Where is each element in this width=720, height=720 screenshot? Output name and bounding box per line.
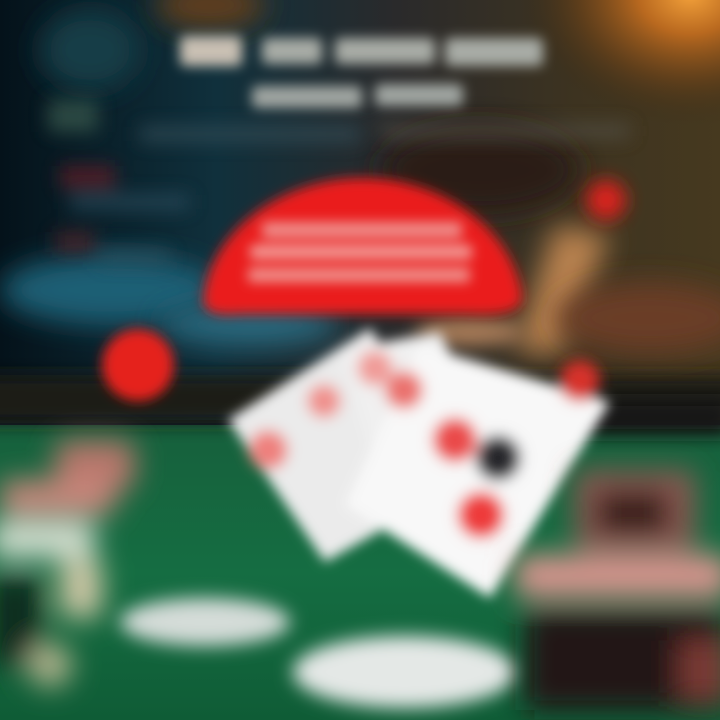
poker chips: bottom centre scattered bbox=[120, 598, 517, 708]
red dot: left bbox=[102, 329, 174, 401]
card pips bbox=[249, 351, 600, 537]
green felt table bbox=[0, 375, 720, 720]
poker chips: left stack bbox=[0, 440, 135, 687]
title text (illegible, blurred) bbox=[180, 36, 543, 108]
red banner bbox=[203, 178, 522, 314]
body text lines (illegible, blurred) bbox=[48, 100, 630, 264]
playing cards bbox=[228, 328, 610, 598]
card: middle bbox=[340, 332, 520, 540]
hand and arm bbox=[415, 225, 720, 355]
banner text (illegible, blurred) bbox=[248, 222, 472, 282]
card: right bbox=[345, 345, 610, 598]
poker chips: right stack bbox=[515, 470, 720, 710]
card: left bbox=[228, 328, 470, 562]
background: dark room bbox=[0, 0, 720, 420]
red dot: upper right bbox=[586, 180, 626, 220]
